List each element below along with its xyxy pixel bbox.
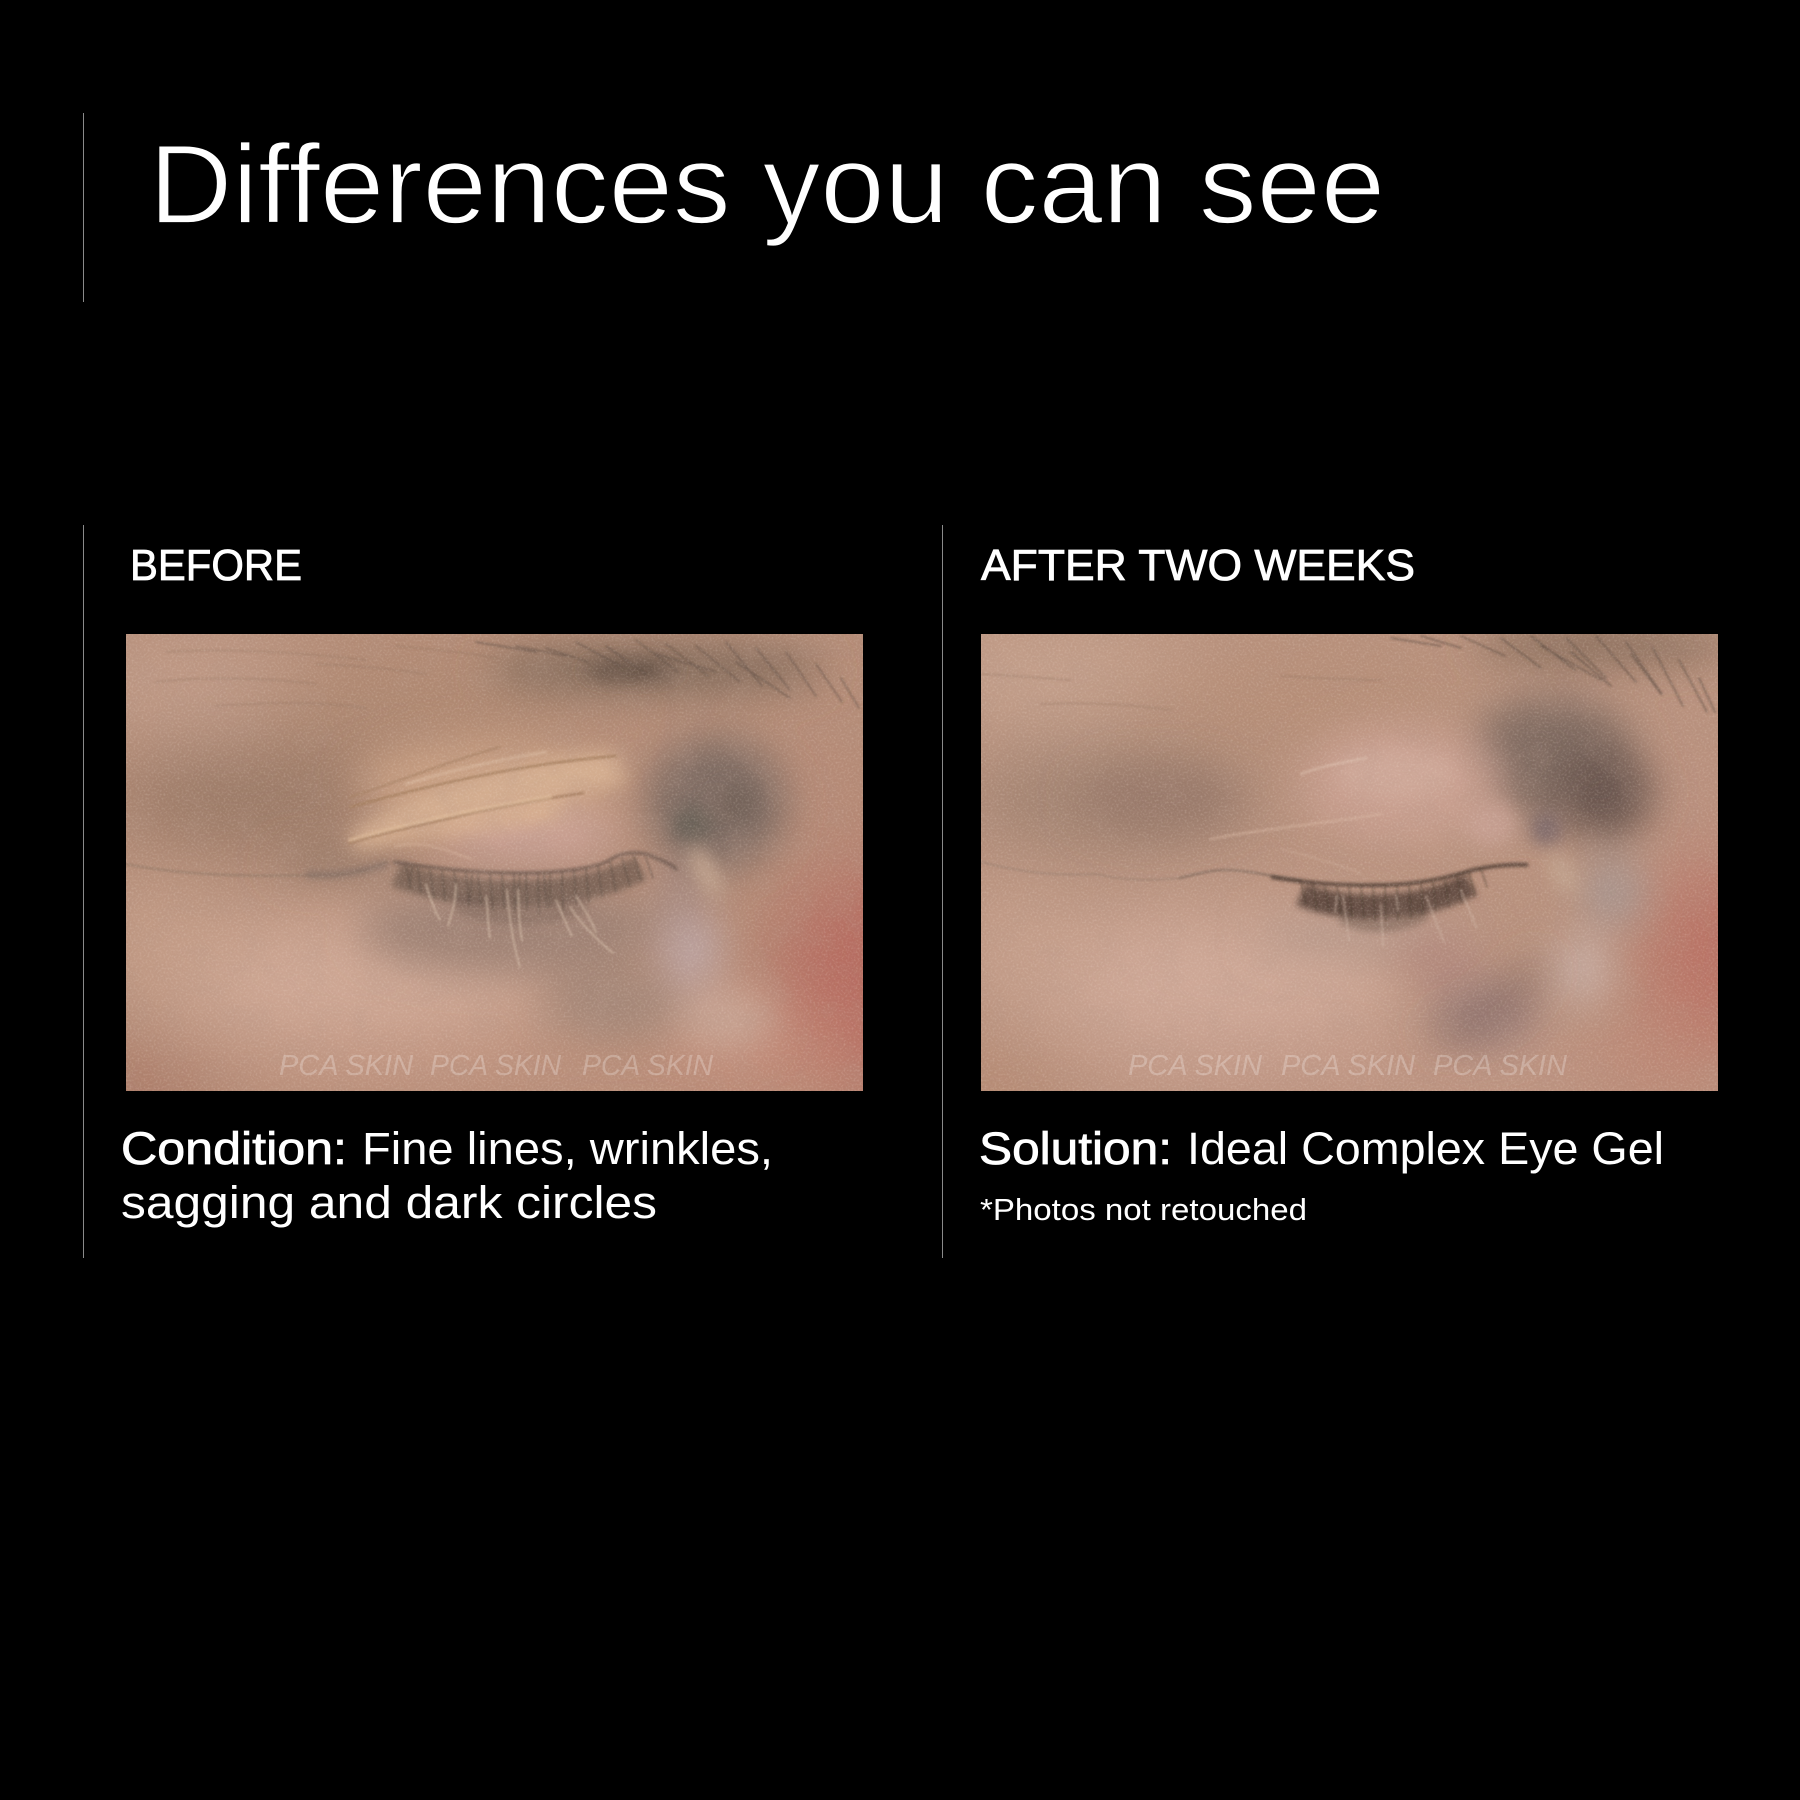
heading: after two weeks: AFTER TWO WEEKS — [981, 541, 1415, 590]
watermark: PCA SKIN — [430, 1050, 561, 1082]
watermark: PCA SKIN — [279, 1050, 413, 1082]
footnote: *Photos not retouched — [980, 1192, 1307, 1227]
photo: after, smoother eyelid — [981, 634, 1718, 1091]
caption: condition: Condition: — [121, 1123, 347, 1174]
caption: condition: sagging and dark circles — [121, 1177, 657, 1228]
watermark — [1128, 1050, 1567, 1082]
title: Differences you can see — [149, 122, 1385, 247]
watermark: PCA SKIN — [1281, 1050, 1415, 1082]
caption: solution — [979, 1123, 1664, 1174]
watermark: PCA SKIN — [1128, 1050, 1262, 1082]
watermark — [279, 1050, 713, 1082]
caption: solution: Ideal Complex Eye Gel — [1187, 1123, 1664, 1174]
watermark: PCA SKIN — [1433, 1050, 1567, 1082]
caption: condition — [121, 1123, 773, 1228]
caption: solution: Solution: — [979, 1123, 1172, 1174]
watermark: PCA SKIN — [582, 1050, 713, 1082]
heading: before: BEFORE — [130, 541, 302, 590]
panel: after two weeks — [881, 525, 1800, 1258]
caption: condition: Fine lines, wrinkles, — [362, 1123, 773, 1174]
panel: before — [26, 525, 956, 1258]
photo: before, wrinkled eyelid — [126, 634, 863, 1091]
